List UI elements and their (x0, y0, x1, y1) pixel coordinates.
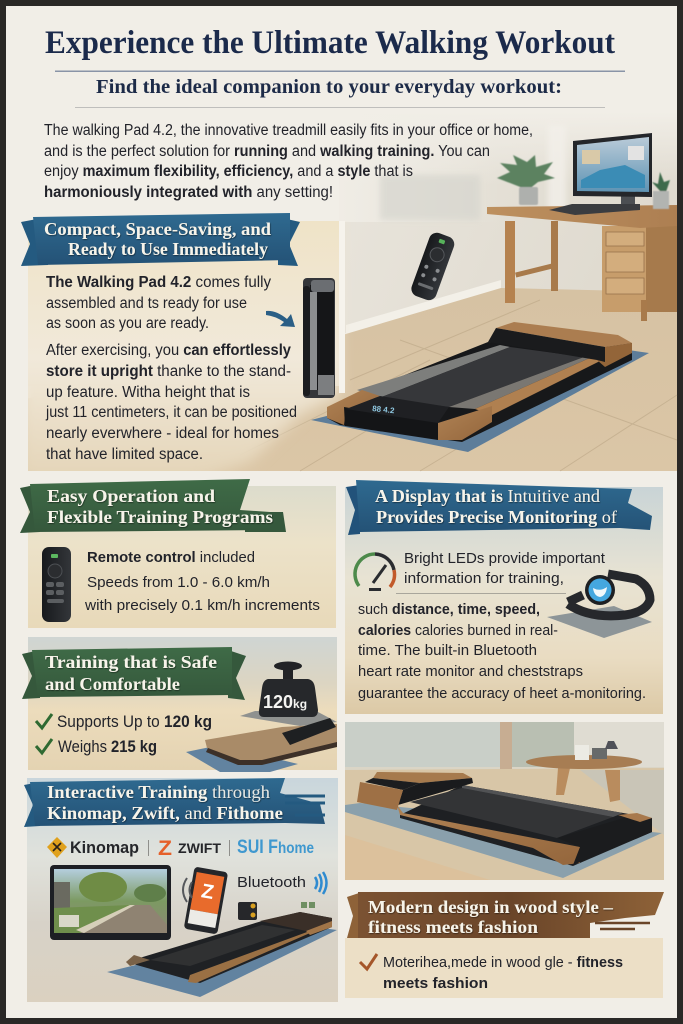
hero treadmill: 88 4.2 (372, 404, 395, 415)
bluetooth label: Bluetooth (237, 874, 306, 891)
phone with Zwift app (184, 867, 228, 934)
body text: with precisely 0.1 km/h increments (84, 597, 320, 614)
body text (84, 549, 320, 614)
heart rate chest strap (547, 574, 652, 638)
introduction text: harmoniously integrated with any setting! (44, 184, 333, 201)
weight and treadmill illustration: 120kg (263, 692, 307, 712)
panel background (345, 938, 663, 998)
icon: check mark (360, 954, 377, 969)
potted plant (497, 155, 555, 205)
specification text: Supports Up to 120 kg (57, 713, 212, 731)
body text (383, 954, 623, 992)
panel: display and monitoring (345, 480, 663, 714)
app logos: ZWIFT (178, 840, 221, 856)
heading banner (20, 479, 286, 533)
desktop monitor and keyboard (549, 133, 652, 215)
treadmill (345, 772, 662, 878)
icon: remote control (42, 547, 71, 622)
body text: Moterihea,mede in wood gle - fitness (383, 954, 623, 971)
room background (345, 722, 664, 880)
hero scene: room with desk and treadmill (20, 112, 677, 471)
desk (487, 205, 677, 321)
phone with Zwift app: Z (200, 880, 215, 904)
heading banner: Kinomap, Zwift, and Fithome (47, 803, 283, 823)
bluetooth label (237, 872, 326, 894)
body text: store it upright thanke to the stand- (46, 363, 291, 380)
body text: meets fashion (383, 975, 488, 992)
icon: check marks (36, 714, 52, 753)
heading banner: A Display that is Intuitive and (375, 486, 600, 506)
app logos (47, 837, 314, 860)
body text: information for training, (404, 570, 564, 587)
body text: just 11 centimeters, it can be positioned (45, 404, 297, 421)
introduction text: and is the perfect solution for running and walking training. You can (44, 143, 490, 160)
hero treadmill (311, 322, 649, 452)
panel: interactive training (24, 778, 338, 1002)
heading banner: and Comfortable (45, 674, 180, 694)
body text: up feature. Witha height that is (46, 384, 250, 401)
weight and treadmill illustration (186, 662, 337, 772)
heading banner: Modern design in wood style – (368, 897, 613, 917)
body text: After exercising, you can effortlessly (46, 342, 291, 359)
app logos: Z (158, 837, 172, 860)
panel: compact and space-saving (20, 213, 345, 480)
heading banner: Ready to Use Immediately (68, 239, 268, 259)
body text: guarantee the accuracy of heet a-monitoring. (358, 685, 646, 702)
small sensor icon (238, 902, 257, 920)
panel: safe and comfortable (22, 637, 337, 772)
small plant (652, 172, 670, 209)
heading banner (21, 213, 300, 266)
body text: Remote control included (87, 549, 255, 566)
title: Experience the Ultimate Walking Workout (45, 25, 615, 61)
body text: calories calories burned in real- (358, 622, 558, 639)
app logos: Kinomap (70, 838, 139, 857)
room wall (339, 112, 677, 335)
body text: as soon as you are ready. (46, 315, 209, 332)
status squares (301, 902, 315, 908)
body text: assembled and ts ready for use (46, 295, 247, 312)
heading banner (346, 480, 652, 535)
icon: speedometer gauge (355, 554, 394, 591)
body text: The Walking Pad 4.2 comes fully (46, 274, 271, 291)
specification text (57, 713, 212, 756)
introduction text: The walking Pad 4.2, the innovative treadmill easily fits in your office or home, (44, 122, 533, 139)
heading banner: Training that is Safe (45, 652, 217, 672)
wooden floor (20, 288, 677, 471)
treadmill illustration (107, 912, 337, 997)
panel background (28, 334, 346, 471)
body text: nearly everwhere - ideal for homes (46, 425, 279, 442)
body text: Speeds from 1.0 - 6.0 km/h (87, 574, 270, 591)
floating remote control (409, 231, 457, 302)
heading banner (24, 778, 325, 827)
panel background (27, 778, 338, 1002)
body text: time. The built-in Bluetooth (358, 642, 537, 659)
panel: easy operation (20, 479, 336, 628)
body text: that have limited space. (46, 446, 203, 463)
panel background (28, 637, 337, 770)
introduction text (44, 122, 533, 201)
icon: wireless waves (183, 878, 192, 902)
body text: Bright LEDs provide important (404, 550, 606, 567)
panel background (345, 487, 663, 714)
heading banner: Compact, Space-Saving, and (44, 219, 271, 239)
panel: wooden treadmill photo (345, 722, 664, 880)
heading banner: fitness meets fashion (368, 917, 538, 937)
introduction text: enjoy maximum flexibility, efficiency, and a style that is (44, 163, 413, 180)
app logos: SUI Fhome (237, 837, 314, 858)
body text: such distance, time, speed, (358, 601, 540, 618)
heading banner: Interactive Training through (47, 782, 270, 802)
heading banner: Flexible Training Programs (47, 507, 273, 527)
subtitle: Find the ideal companion to your everyday workout: (96, 76, 562, 98)
panel: modern wood design (345, 892, 664, 998)
floor (345, 768, 664, 880)
coffee table (526, 741, 642, 802)
body text: heart rate monitor and cheststraps (358, 663, 583, 680)
panel background (28, 486, 336, 628)
specification text: Weighs 215 kg (58, 738, 157, 756)
heading banner (347, 892, 664, 938)
body text (358, 550, 646, 702)
upright folded treadmill (303, 278, 335, 398)
icon: arrow (266, 311, 295, 327)
tablet with route video (50, 865, 171, 940)
body text (45, 274, 297, 463)
heading banner: Provides Precise Monitoring of (376, 507, 617, 527)
heading banner (22, 647, 246, 700)
heading banner: Easy Operation and (47, 486, 215, 506)
